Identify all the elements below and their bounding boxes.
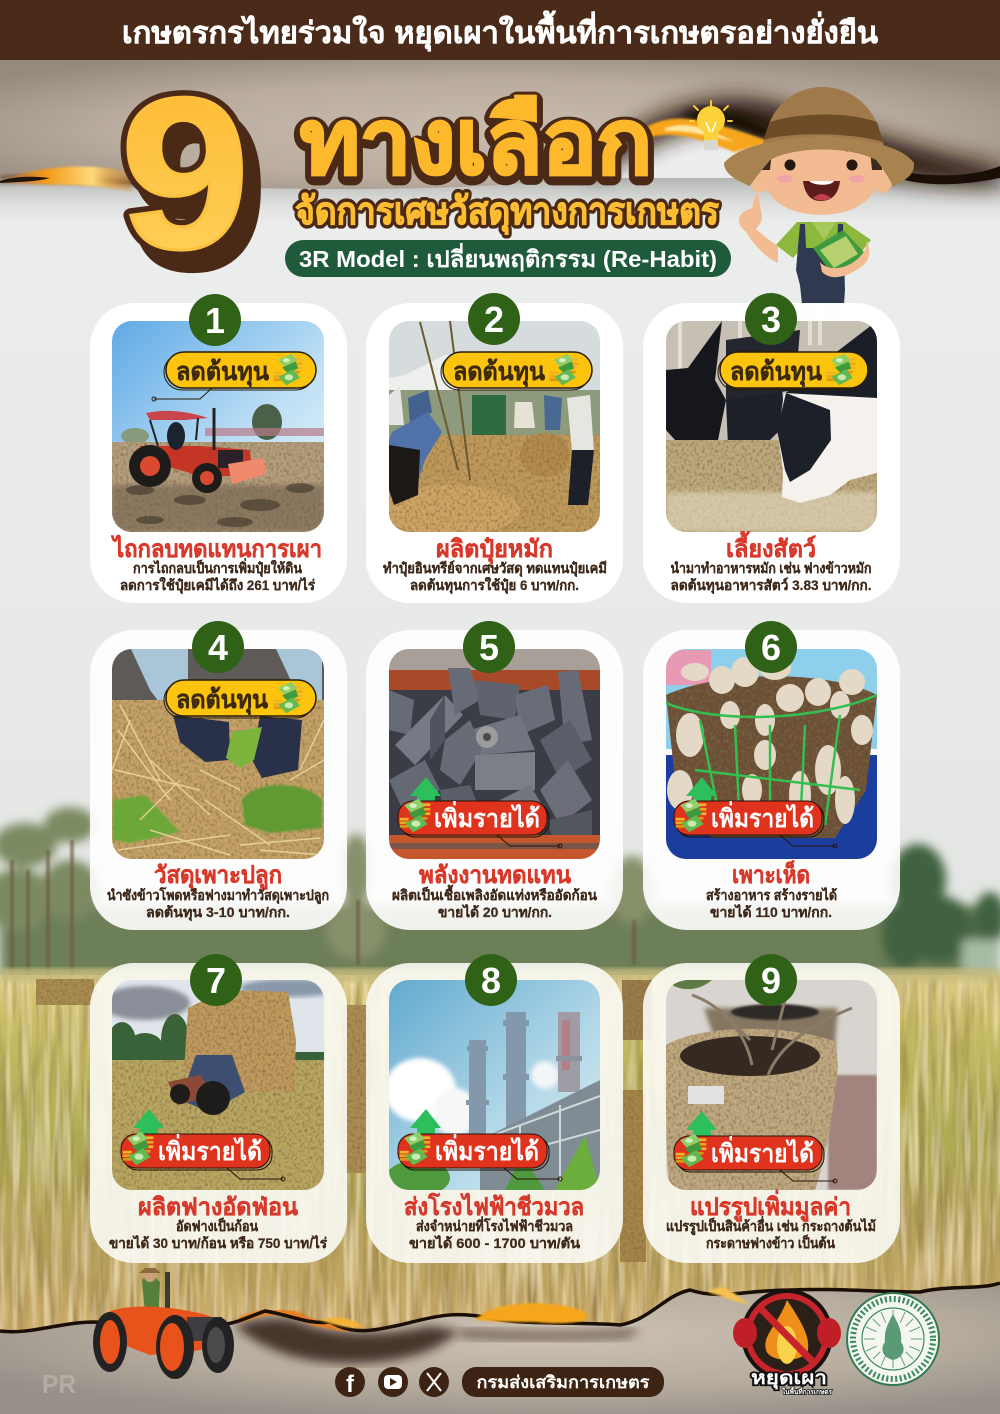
card 2 — [366, 293, 623, 603]
badge: เพิ่มรายได้: เพิ่มรายได้ — [158, 1134, 262, 1166]
number 2: 2 — [484, 299, 504, 340]
icon: tractor with farmer — [93, 1268, 234, 1379]
logo: stop burning — [733, 1289, 841, 1396]
3R model pill — [285, 240, 731, 277]
badge: เพิ่มรายได้ — [674, 1111, 837, 1183]
number 3 — [745, 293, 797, 345]
card 3 description — [670, 560, 872, 594]
title: ทางเลือก: ทางเลือก — [300, 93, 652, 193]
card 4 description — [107, 886, 329, 921]
shirt — [776, 222, 871, 258]
header bar — [0, 0, 1000, 60]
badge: ลดต้นทุน — [718, 352, 868, 390]
watermark: PR — [42, 1369, 76, 1399]
badge: ลดต้นทุน — [152, 352, 316, 401]
number 1 — [189, 294, 241, 346]
panel — [90, 963, 347, 1263]
pointing arm — [746, 226, 778, 263]
card 7 description — [109, 1217, 327, 1251]
card 8 — [366, 954, 623, 1263]
card 9 description: กระดาษฟางข้าว เป็นต้น — [706, 1234, 835, 1251]
panel — [643, 630, 900, 930]
number 5 — [463, 621, 515, 673]
ears — [749, 163, 771, 193]
number 8: 8 — [481, 960, 501, 1001]
panel — [366, 630, 623, 930]
card 1 description: ลดการใช้ปุ๋ยเคมีได้ถึง 261 บาท/ไร่ — [120, 576, 315, 594]
card 2 title: ผลิตปุ๋ยหมัก — [436, 536, 553, 565]
number 6: 6 — [761, 627, 781, 668]
photo: charcoal briquettes — [389, 649, 600, 859]
card 4 — [90, 621, 347, 930]
number 8 — [465, 954, 517, 1006]
card 9 — [643, 954, 900, 1263]
card 8 description: ส่งจำหน่ายที่โรงไฟฟ้าชีวมวล — [416, 1216, 573, 1234]
panel — [366, 963, 623, 1263]
title: ทางเลือก: ทางเลือก — [300, 96, 652, 196]
photo: straw pulp pot — [666, 979, 877, 1190]
card 9 description — [666, 1216, 876, 1251]
3R model pill: 3R Model : เปลี่ยนพฤติกรรม (Re-Habit) — [299, 242, 717, 272]
card 1 description — [120, 558, 315, 594]
panel — [643, 963, 900, 1263]
number 6 — [745, 621, 797, 673]
badge: เพิ่มรายได้: เพิ่มรายได้ — [711, 801, 814, 833]
card 1 — [90, 294, 347, 603]
photo: straw bales on tractor — [112, 980, 324, 1190]
number 9 — [745, 954, 797, 1006]
badge: เพิ่มรายได้: เพิ่มรายได้ — [434, 801, 540, 833]
big number 9: 9 — [132, 68, 262, 310]
badge: ลดต้นทุน: ลดต้นทุน — [176, 358, 269, 388]
panel — [643, 303, 900, 603]
card 9 title: แปรรูปเพิ่มมูลค่า — [690, 1189, 851, 1222]
number 7 — [190, 954, 242, 1006]
number 4: 4 — [208, 627, 228, 668]
card 3 description: ลดต้นทุนอาหารสัตว์ 3.83 บาท/กก. — [670, 577, 872, 594]
number 4 — [192, 621, 244, 673]
card 5 description: ขายได้ 20 บาท/กก. — [438, 903, 552, 920]
card 5 description — [392, 884, 597, 920]
badge: เพิ่มรายได้ — [674, 777, 837, 848]
background: rice field — [0, 968, 1000, 1335]
card 8 description — [409, 1216, 580, 1251]
badge: ลดต้นทุน: ลดต้นทุน — [453, 358, 545, 388]
card 4 description: ลดต้นทุน 3-10 บาท/กก. — [146, 904, 290, 921]
number 2 — [468, 293, 520, 345]
photo: biomass power plant — [384, 980, 600, 1196]
number 5: 5 — [479, 627, 499, 668]
subtitle: จัดการเศษวัสดุทางการเกษตร — [295, 191, 720, 235]
department name pill — [462, 1367, 664, 1397]
photo: mushrooms in basket — [666, 649, 877, 859]
card 3 title: เลี้ยงสัตว์ — [726, 530, 816, 563]
big number 9: 9 — [120, 52, 250, 294]
burnt paper top — [0, 60, 1000, 233]
card 2 description: ลดต้นทุนการใช้ปุ๋ย 6 บาท/กก. — [410, 576, 579, 594]
card 9 description: แปรรูปเป็นสินค้าอื่น เช่น กระถางต้นไม้ — [666, 1216, 876, 1235]
card 8 description: ขายได้ 600 - 1700 บาท/ตัน — [409, 1234, 580, 1251]
card 6 description — [706, 886, 837, 920]
card 2 description: ทำปุ๋ยอินทรีย์จากเศษวัสดุ ทดแทนปุ๋ยเคมี — [383, 560, 607, 577]
social icons — [335, 1367, 449, 1398]
flame streak right — [648, 119, 772, 152]
card 4 title: วัสดุเพาะปลูก — [154, 862, 282, 891]
panel — [366, 303, 623, 603]
number 7: 7 — [206, 960, 226, 1001]
card 7 description: อัดฟางเป็นก้อน — [176, 1217, 258, 1234]
overalls — [796, 224, 845, 304]
photo: straw mulch — [112, 649, 324, 859]
logo: stop burning: หยุดเผา — [751, 1368, 827, 1390]
card 4 description: นำซังข้าวโพดหรือฟางมาทำวัสดุเพาะปลูก — [107, 886, 329, 904]
hat brim — [724, 136, 914, 187]
icon: X — [419, 1367, 449, 1397]
card 6 title: เพาะเห็ด — [732, 860, 810, 889]
background: tree line — [0, 807, 1000, 982]
panel — [90, 630, 347, 930]
badge: เพิ่มรายได้ — [121, 1109, 285, 1181]
hat crown — [762, 87, 884, 146]
badge: ลดต้นทุน — [164, 680, 316, 718]
card 5 — [366, 621, 623, 930]
card 8 title: ส่งโรงไฟฟ้าชีวมวล — [404, 1192, 584, 1221]
legs — [802, 300, 815, 324]
badge: ลดต้นทุน — [441, 352, 592, 390]
badge: เพิ่มรายได้ — [398, 1109, 562, 1181]
book and arm — [813, 230, 865, 278]
icon: facebook: f — [346, 1371, 355, 1398]
big number 9: 9 — [120, 52, 250, 294]
card 1 title: ไถกลบทดแทนการเผา — [110, 534, 322, 563]
card 6 — [643, 621, 900, 930]
logo: stop burning: ในพื้นที่การเกษตร — [782, 1385, 832, 1396]
card 2 description — [383, 560, 607, 594]
card 6 description: สร้างอาหาร สร้างรายได้ — [706, 886, 837, 903]
department name pill: กรมส่งเสริมการเกษตร — [476, 1373, 650, 1392]
badge: ลดต้นทุน: ลดต้นทุน — [730, 358, 822, 388]
badge: เพิ่มรายได้: เพิ่มรายได้ — [711, 1136, 814, 1168]
hair — [762, 150, 882, 170]
card 3 description: นำมาทำอาหารหมัก เช่น ฟางข้าวหมัก — [670, 560, 872, 576]
logo: department seal — [847, 1293, 939, 1385]
farmer character — [724, 87, 914, 324]
number 3: 3 — [761, 299, 781, 340]
icon: youtube — [378, 1367, 408, 1397]
panel — [90, 303, 347, 603]
card 7 description: ขายได้ 30 บาท/ก้อน หรือ 750 บาท/ไร่ — [109, 1234, 327, 1251]
card 3 — [643, 293, 900, 603]
badge: เพิ่มรายได้ — [398, 777, 562, 848]
subtitle: จัดการเศษวัสดุทางการเกษตร — [295, 191, 720, 235]
card 7 — [90, 954, 347, 1263]
face — [762, 145, 880, 215]
card 5 title: พลังงานทดแทน — [419, 862, 572, 889]
flame streak left — [0, 166, 132, 192]
photo: cows eating straw — [666, 321, 877, 532]
photo: tractor plough field — [112, 321, 324, 532]
card 6 description: ขายได้ 110 บาท/กก. — [710, 903, 832, 920]
header title: เกษตรกรไทยร่วมใจ หยุดเผาในพื้นที่การเกษตรอย่างยั่งยืน — [122, 10, 878, 52]
number 1: 1 — [205, 300, 225, 341]
card 1 description: การไถกลบเป็นการเพิ่มปุ๋ยให้ดิน — [133, 558, 302, 577]
badge: ลดต้นทุน: ลดต้นทุน — [176, 686, 268, 716]
card 7 title: ผลิตฟางอัดฟ่อน — [138, 1194, 299, 1221]
badge: เพิ่มรายได้: เพิ่มรายได้ — [435, 1134, 539, 1166]
photo: compost making — [380, 321, 600, 535]
burnt paper bottom — [0, 1283, 1000, 1414]
card 5 description: ผลิตเป็นเชื้อเพลิงอัดแท่งหรืออัดก้อน — [392, 884, 597, 903]
flame on edge — [475, 1303, 588, 1323]
number 9: 9 — [761, 960, 781, 1001]
icon: light bulb — [690, 101, 732, 150]
